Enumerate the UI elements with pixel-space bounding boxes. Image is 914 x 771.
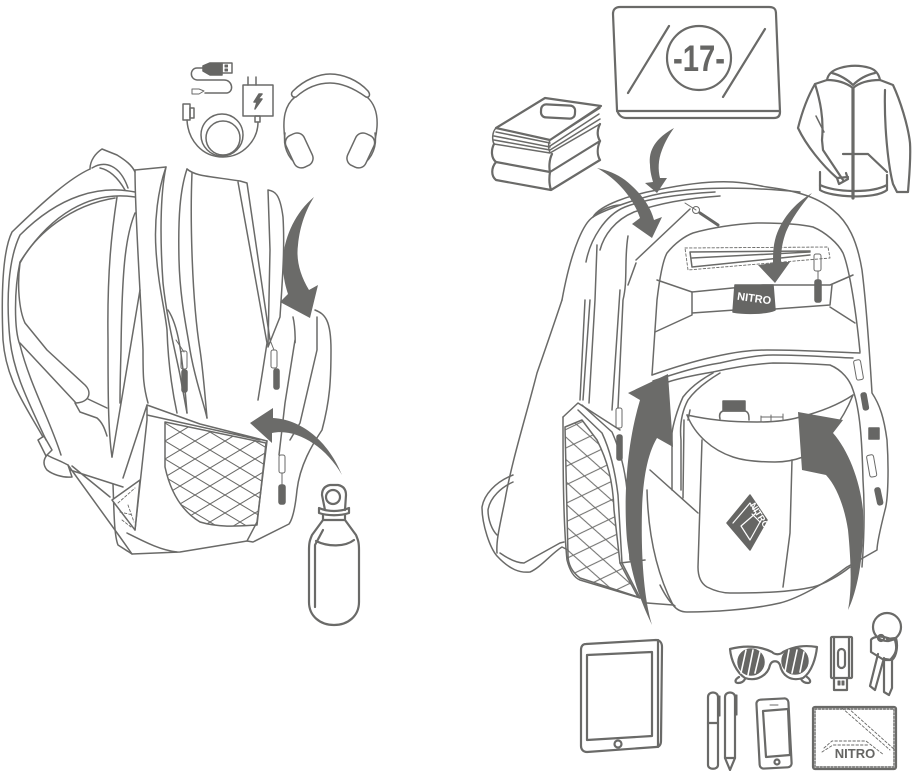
outer shell bbox=[580, 182, 888, 612]
right backpack front view bbox=[482, 182, 888, 612]
icon: pens bbox=[708, 692, 737, 770]
icon: laptop bbox=[613, 7, 780, 118]
icon: headphones bbox=[283, 74, 377, 171]
arrow: bottle into side pocket bbox=[250, 408, 342, 475]
shoulder straps bbox=[2, 149, 135, 477]
mesh side pocket bbox=[68, 405, 267, 554]
icon: sunglasses bbox=[730, 646, 817, 683]
top pocket bbox=[652, 223, 860, 375]
arrow: into top pocket bbox=[758, 193, 812, 283]
icon: keys bbox=[870, 613, 901, 695]
icon: nitro wallet bbox=[813, 707, 896, 769]
wallet logo text: NITRO bbox=[835, 746, 875, 761]
icon: tablet bbox=[581, 640, 662, 752]
icon: water bottle bbox=[309, 485, 359, 625]
icon: usb stick bbox=[831, 637, 852, 690]
icon: stack of books bbox=[492, 98, 601, 190]
logo text: NITRO bbox=[748, 501, 771, 530]
arrow: laptop into back compartment bbox=[645, 128, 674, 193]
badge logo text: NITRO bbox=[736, 291, 772, 307]
main front pocket bbox=[647, 373, 853, 606]
zipper band bbox=[652, 350, 864, 567]
arrow: small items into front pocket bbox=[798, 412, 863, 610]
laptop sticker number: -17- bbox=[673, 38, 725, 79]
icon: smartphone bbox=[756, 698, 792, 769]
arrow: tablet into laptop pocket bbox=[626, 374, 673, 625]
zipper pulls bbox=[176, 340, 285, 504]
arrow: books into main compartment bbox=[597, 168, 662, 238]
arrow: into left front pocket bbox=[280, 197, 318, 318]
logo: diamond mark bbox=[727, 495, 771, 550]
left backpack side view bbox=[2, 149, 331, 554]
mesh side pocket right view bbox=[563, 403, 645, 598]
shoulder strap and loop bbox=[482, 205, 620, 572]
icon: hoodie bbox=[798, 66, 910, 198]
main compartment panels bbox=[108, 167, 331, 542]
zipper pulls right view bbox=[616, 203, 883, 505]
icon: charging cables bbox=[183, 63, 273, 157]
